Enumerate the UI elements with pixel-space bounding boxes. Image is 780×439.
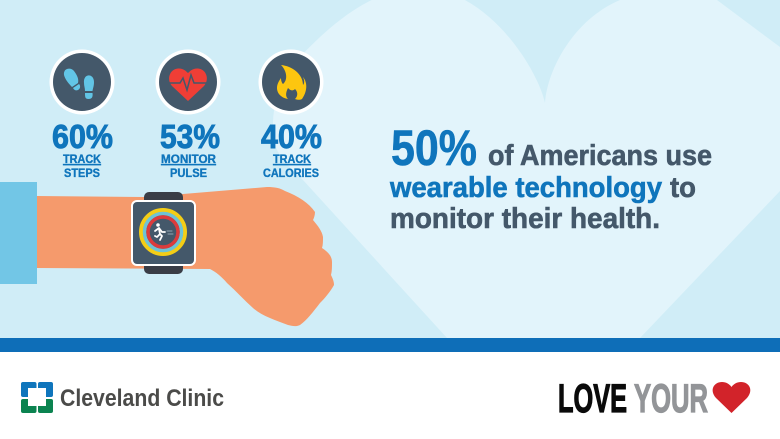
YOUR: YOUR [634,377,708,421]
activity rings [141,210,185,254]
background heart [273,0,780,338]
percentage: 60% [52,118,113,155]
label line 2: CALORIES [263,166,319,180]
footer panel [0,352,780,439]
icon: red heart [713,382,750,413]
icon: runner [155,223,173,240]
label: TRACK [273,152,311,166]
Cleveland Clinic logo [21,382,224,413]
headline line 2 emphasis: wearable technology [389,172,662,204]
sleeve cuff [0,182,37,284]
hand [37,187,334,326]
headline line 1: of Americans use [488,140,712,172]
watch face [132,201,195,265]
label: TRACK [63,152,101,166]
icon: flame [258,50,324,114]
logo mark [21,382,53,413]
blue divider band [0,338,780,352]
headline [389,120,712,235]
stat: track calories [258,50,324,180]
headline 50%: 50% [391,120,477,176]
label: MONITOR [161,152,216,166]
percentage: 40% [261,118,322,155]
label line 2: PULSE [170,166,207,180]
headline line 2 end: to [670,172,696,204]
icon: heart with pulse [156,50,220,114]
icon: footprints [50,50,114,114]
smartwatch [132,192,195,274]
Love Your Heart logo [558,377,750,421]
stat: track steps [50,50,114,180]
watch strap [144,192,183,274]
label line 2: STEPS [64,166,100,180]
stat: monitor pulse [156,50,220,180]
logo wordmark: Cleveland Clinic [60,385,224,412]
headline line 3: monitor their health. [390,203,660,235]
background panel [0,0,780,338]
percentage: 53% [160,118,220,155]
LOVE: LOVE [558,377,627,421]
